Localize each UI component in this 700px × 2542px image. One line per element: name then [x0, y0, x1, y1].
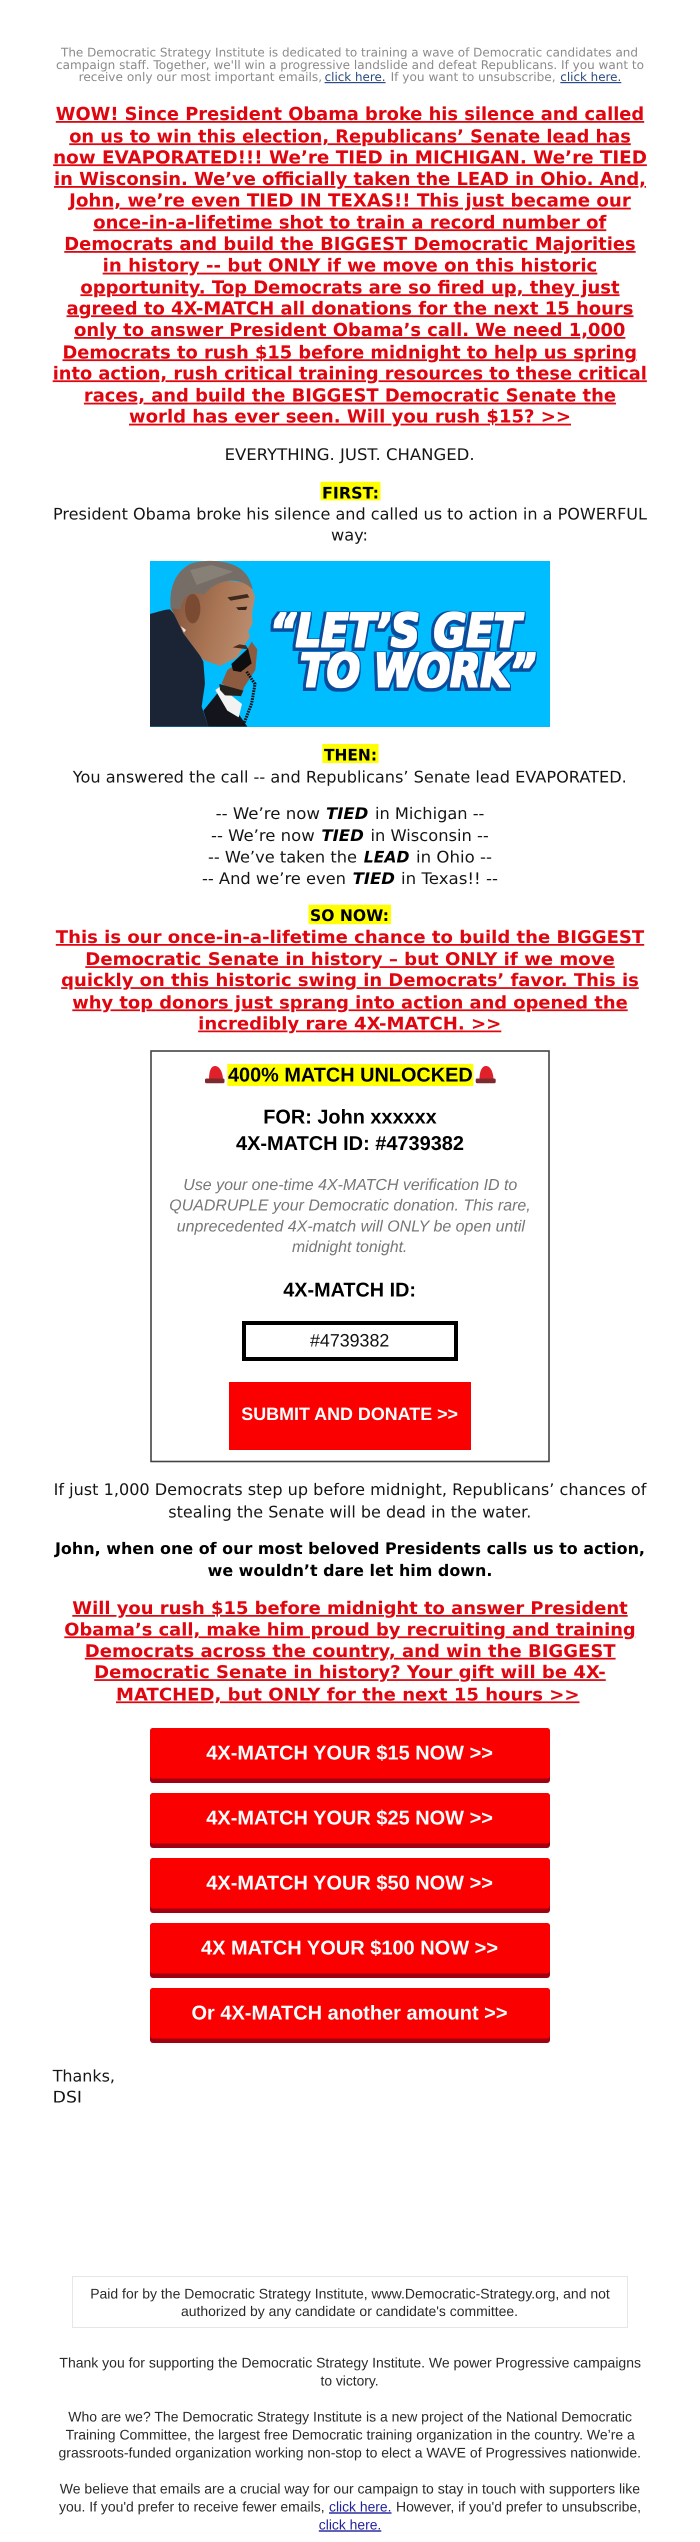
disclaimer box: authorized by any candidate or candidate's committee.	[181, 2303, 518, 2319]
button: another amount	[150, 1988, 550, 2043]
preheader text block: click here.	[560, 70, 621, 84]
list: state race updates: in Michigan --	[375, 804, 484, 823]
headline: red appeal: into action, rush critical training resources to these critical	[53, 363, 647, 384]
red appeal paragraph: will you rush: Democrats across the country, and win the BIGGEST	[85, 1642, 616, 1662]
preheader text block	[56, 46, 644, 84]
preheader text block: receive only our most important emails,	[79, 70, 322, 84]
footer: who are we: Training Committee, the largest free Democratic training organization in the country. We’re a	[66, 2426, 635, 2442]
ID input box	[244, 1323, 456, 1359]
preheader text block: If you want to unsubscribe,	[391, 70, 556, 84]
button: match $25	[150, 1793, 550, 1848]
headline: red appeal: Democrats and build the BIGGEST Democratic Majorities	[64, 234, 636, 255]
signature: DSI	[53, 2087, 82, 2106]
icon: left siren	[205, 1066, 224, 1083]
text: if just 1,000 democrats: If just 1,000 Democrats step up before midnight, Republicans’ chances of	[54, 1480, 647, 1499]
headline: red appeal: in history -- but ONLY if we move on this historic	[103, 256, 597, 277]
preheader text block: The Democratic Strategy Institute is dedicated to training a wave of Democratic candidates and	[60, 46, 638, 60]
headline: red appeal: John, we’re even TIED IN TEXAS!! This just became our	[67, 191, 631, 212]
footer: email preferences: We believe that emails are a crucial way for our campaign to stay in touch with supporters like	[60, 2480, 640, 2496]
list: state race updates: LEAD	[364, 848, 409, 867]
bold text: John, beloved presidents: John, when one of our most beloved Presidents calls us to action,	[54, 1539, 645, 1558]
button: match $25: 4X-MATCH YOUR $25 NOW >>	[206, 1807, 493, 1829]
text: president broke silence	[53, 504, 647, 544]
footer: email preferences: click here.	[319, 2516, 381, 2532]
list: state race updates: -- We’ve taken the	[208, 848, 357, 867]
headline: red appeal: only to answer President Obama’s call. We need 1,000	[74, 320, 625, 341]
bold text: John, beloved presidents: we wouldn’t dare let him down.	[208, 1561, 492, 1580]
bold text: John, beloved presidents	[54, 1539, 645, 1580]
portrait figure	[150, 561, 257, 727]
headline: red appeal: opportunity. Top Democrats are so fired up, they just	[80, 277, 620, 298]
submit button: SUBMIT AND DONATE >>	[241, 1404, 458, 1424]
disclaimer box: Paid for by the Democratic Strategy Institute, www.Democratic-Strategy.org, and not	[90, 2285, 610, 2301]
button: another amount: Or 4X-MATCH another amount >>	[192, 2002, 508, 2024]
submit button	[229, 1382, 471, 1450]
red appeal paragraph: once in a lifetime: This is our once-in-a-lifetime chance to build the BIGGEST	[56, 928, 644, 948]
text: president broke silence: way:	[331, 525, 368, 544]
footer: email preferences	[59, 2480, 641, 2532]
list: state race updates: in Ohio --	[416, 848, 492, 867]
text: if just 1,000 democrats	[54, 1480, 647, 1522]
italic explanation: unprecedented 4X-match will ONLY be open until	[177, 1219, 525, 1236]
text: everything just changed: EVERYTHING. JUST. CHANGED.	[225, 445, 475, 464]
headline: red appeal: on us to win this election, Republicans’ Senate lead has	[69, 126, 631, 147]
italic explanation: midnight tonight.	[292, 1239, 407, 1256]
disclaimer box	[72, 2276, 628, 2328]
recipient and ID: FOR: John xxxxxx	[263, 1106, 437, 1128]
banner slogan	[270, 604, 536, 698]
headline: red appeal: in Wisconsin. We’ve officially taken the LEAD in Ohio. And,	[54, 169, 646, 190]
red appeal paragraph: will you rush: Obama’s call, make him proud by recruiting and training	[64, 1620, 636, 1640]
headline: red appeal: Democrats to rush $15 before midnight to help us spring	[62, 342, 637, 363]
red appeal paragraph: once in a lifetime: why top donors just sprang into action and opened the	[72, 993, 628, 1013]
red appeal paragraph: will you rush: MATCHED, but ONLY for the next 15 hours >>	[116, 1685, 580, 1705]
signature: Thanks,	[52, 2067, 115, 2086]
italic explanation	[169, 1177, 531, 1256]
list: state race updates: -- We’re now	[211, 826, 315, 845]
list: state race updates: in Texas!! --	[401, 869, 498, 888]
footer: who are we: Who are we? The Democratic Strategy Institute is a new project of the National Democratic	[68, 2408, 632, 2424]
text: if just 1,000 democrats: stealing the Senate will be dead in the water.	[168, 1502, 531, 1522]
headline: red appeal: agreed to 4X-MATCH all donations for the next 15 hours	[66, 298, 634, 319]
headline: red appeal: races, and build the BIGGEST Democratic Senate the	[84, 386, 616, 407]
red appeal paragraph: once in a lifetime	[56, 928, 644, 1034]
label: first: FIRST:	[322, 483, 379, 502]
list: state race updates	[202, 804, 498, 888]
footer: email preferences: However, if you'd prefer to unsubscribe,	[396, 2498, 641, 2514]
button: match $100	[150, 1923, 550, 1978]
button: match $50: 4X-MATCH YOUR $50 NOW >>	[206, 1872, 493, 1894]
footer: who are we: grassroots-funded organization working non-stop to elect a WAVE of Progressives nationwide.	[58, 2444, 641, 2460]
list: state race updates: in Wisconsin --	[370, 826, 489, 845]
preheader text block: click here.	[325, 70, 386, 84]
footer: thank you: Thank you for supporting the Democratic Strategy Institute. We power Progressive campaigns	[59, 2354, 641, 2370]
red appeal paragraph: will you rush: Democratic Senate in history? Your gift will be 4X-	[94, 1663, 606, 1683]
footer: thank you	[59, 2354, 641, 2388]
headline: red appeal: WOW! Since President Obama broke his silence and called	[56, 104, 644, 125]
red appeal paragraph: once in a lifetime: incredibly rare 4X-MATCH. >>	[198, 1014, 501, 1034]
red appeal paragraph: will you rush	[64, 1599, 636, 1705]
red appeal paragraph: once in a lifetime: Democratic Senate in history – but ONLY if we move	[85, 950, 615, 970]
list: state race updates: -- We’re now	[216, 804, 320, 823]
italic explanation: Use your one-time 4X-MATCH verification ID to	[183, 1177, 517, 1194]
label: so now: SO NOW:	[310, 906, 389, 925]
footer: thank you: to victory.	[320, 2372, 379, 2388]
card heading highlight: 400% MATCH UNLOCKED	[228, 1065, 473, 1087]
banner slogan: “LET’S GET	[270, 604, 524, 658]
label: then: THEN:	[324, 745, 377, 764]
text: you answered the call: You answered the call -- and Republicans’ Senate lead EVAPORATED.	[72, 768, 627, 787]
headline: red appeal: world has ever seen. Will you rush $15? >>	[129, 407, 571, 428]
panel: 4X match card	[151, 1051, 549, 1462]
recipient and ID	[236, 1106, 464, 1155]
headline: red appeal: once-in-a-lifetime shot to train a record number of	[93, 212, 606, 233]
list: state race updates: TIED	[353, 869, 395, 888]
banner slogan: TO WORK”	[300, 644, 536, 698]
headline: red appeal	[53, 104, 647, 428]
footer: email preferences: you. If you'd prefer to receive fewer emails,	[59, 2498, 325, 2514]
button: match $100: 4X MATCH YOUR $100 NOW >>	[201, 1937, 498, 1959]
recipient and ID: 4X-MATCH ID: #4739382	[236, 1133, 464, 1155]
list: state race updates: -- And we’re even	[202, 869, 346, 888]
button: match $15: 4X-MATCH YOUR $15 NOW >>	[206, 1742, 493, 1764]
italic explanation: QUADRUPLE your Democratic donation. This rare,	[169, 1198, 531, 1215]
banner image: Obama on the phone, let's get to work	[150, 561, 550, 727]
red appeal paragraph: once in a lifetime: quickly on this historic swing in Democrats’ favor. This is	[61, 971, 639, 991]
ID input box: #4739382	[310, 1331, 389, 1351]
red appeal paragraph: will you rush: Will you rush $15 before midnight to answer President	[72, 1599, 628, 1619]
icon: right siren	[476, 1066, 496, 1083]
footer: who are we	[58, 2408, 641, 2460]
button: match $15	[150, 1728, 550, 1783]
headline: red appeal: now EVAPORATED!!! We’re TIED in MICHIGAN. We’re TIED	[53, 147, 647, 168]
preheader text block: campaign staff. Together, we'll win a progressive landslide and defeat Republicans. If you want to	[56, 58, 644, 72]
text: president broke silence: President Obama broke his silence and called us to action in a POWERFUL	[53, 504, 647, 523]
list: state race updates: TIED	[326, 804, 368, 823]
button: match $50	[150, 1858, 550, 1913]
footer: email preferences: click here.	[329, 2498, 392, 2514]
list: state race updates: TIED	[321, 826, 364, 845]
signature	[52, 2067, 115, 2106]
ID label: 4X-MATCH ID:	[283, 1280, 416, 1302]
